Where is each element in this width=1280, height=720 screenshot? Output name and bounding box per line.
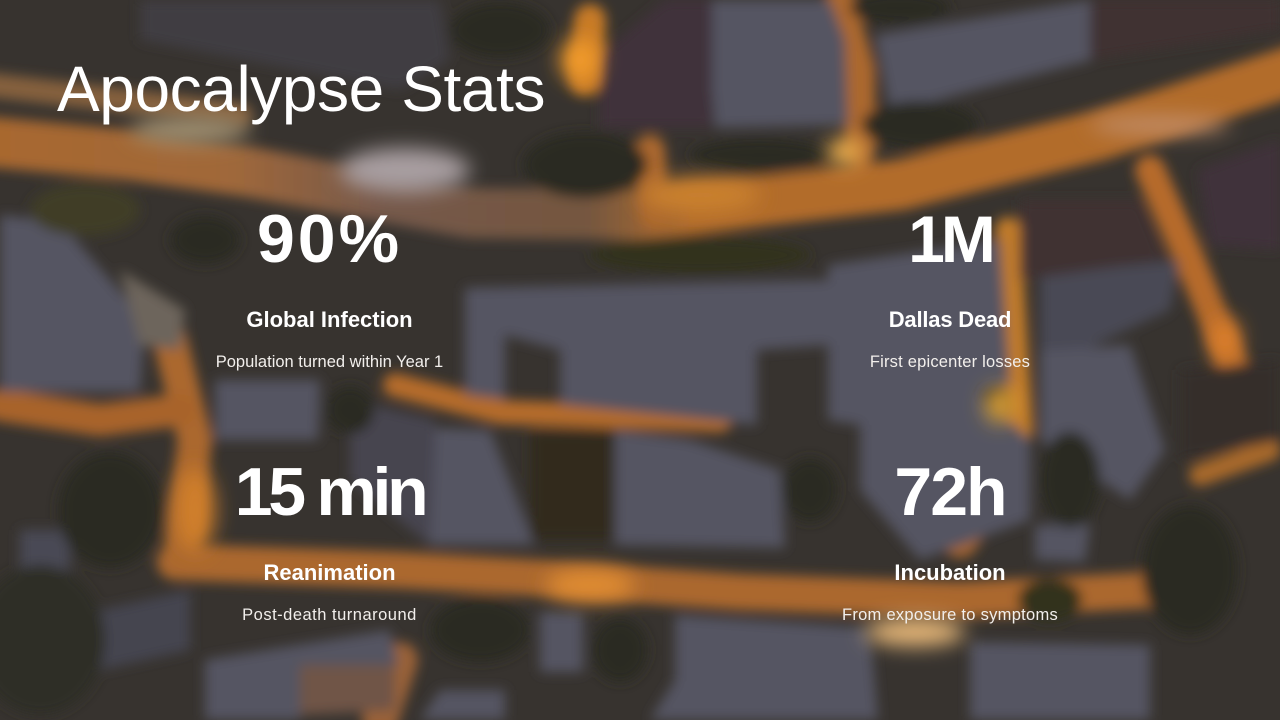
- stat value: 90%: 90%: [257, 201, 402, 277]
- stat value: 15 min: 15 min: [235, 454, 424, 530]
- bright lights: [130, 38, 1240, 646]
- dark brown roofs: [530, 0, 1280, 540]
- stat value: 72h: 72h: [894, 454, 1006, 530]
- stat value: 1M: 1M: [908, 202, 992, 276]
- stat card: Dallas dead: [870, 202, 1030, 371]
- stat heading: Dallas dead: Dallas Dead: [889, 307, 1011, 332]
- stat card: global infection: [216, 201, 443, 371]
- stat description: incubation: From exposure to symptoms: [842, 606, 1058, 624]
- stat description: reanimation: Post-death turnaround: [242, 606, 417, 624]
- title: Apocalypse Stats: [57, 53, 545, 125]
- stat description: global infection: Population turned within Year 1: [216, 353, 443, 371]
- stat card: reanimation: [235, 454, 424, 624]
- stat heading: reanimation: Reanimation: [263, 560, 396, 585]
- stat heading: incubation: Incubation: [894, 560, 1006, 585]
- stat card: incubation: [842, 454, 1058, 624]
- stat description: Dallas dead: First epicenter losses: [870, 353, 1030, 371]
- stat heading: global infection: Global Infection: [246, 307, 413, 332]
